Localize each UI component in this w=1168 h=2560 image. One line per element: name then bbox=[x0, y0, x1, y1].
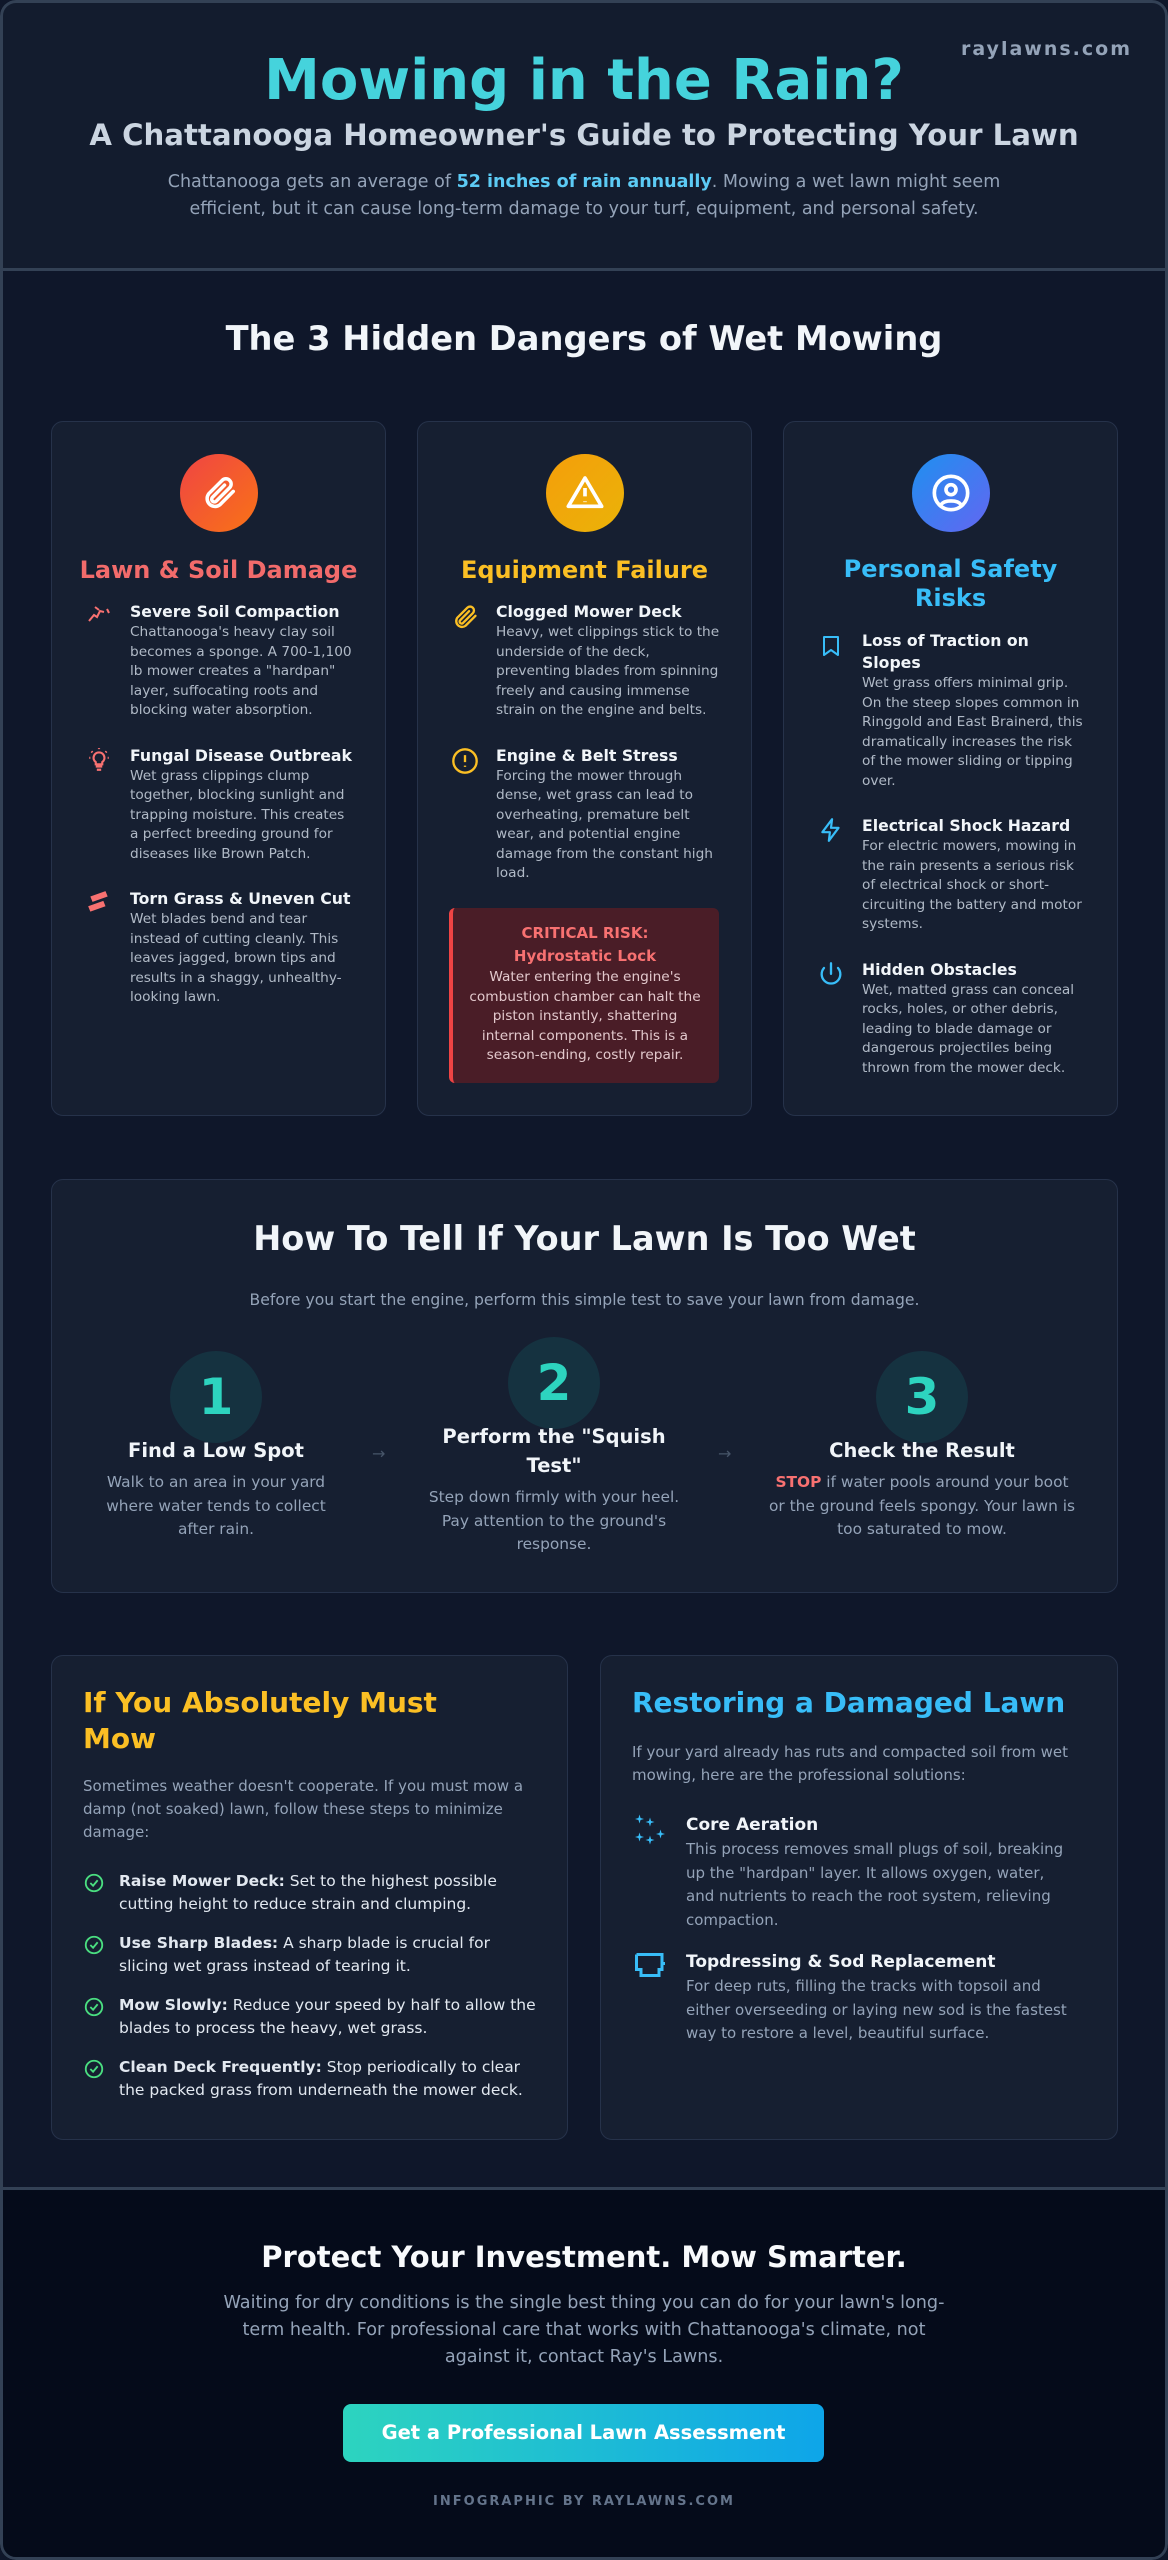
step 2: response. bbox=[517, 1535, 591, 1553]
item: shock: For electric mowers, mowing in the rain presents a serious risk of electrical shock or short-circuiting the battery and motor systems. bbox=[862, 838, 1082, 932]
subtitle: A Chattanooga Homeowner's Guide to Protecting Your Lawn bbox=[89, 118, 1079, 152]
checklist bbox=[84, 1872, 536, 2099]
item: obstacles: Hidden Obstacles bbox=[862, 960, 1017, 978]
item: clogged deck: Heavy, wet clippings stick to the underside of the deck, preventing blades from spinning freely and causing immense strain on the engine and belts. bbox=[496, 624, 719, 718]
item: shock bbox=[821, 816, 1082, 932]
CTA button: Get a Professional Lawn Assessment bbox=[382, 2421, 785, 2444]
item: topdressing bbox=[635, 1952, 1067, 2042]
item: clogged deck: Clogged Mower Deck bbox=[496, 602, 682, 621]
card title: Lawn & Soil Damage bbox=[80, 556, 357, 584]
step 3: Check the Result bbox=[829, 1439, 1015, 1462]
subheading: Before you start the engine, perform this simple test to save your lawn from damage. bbox=[250, 1291, 919, 1309]
footer panel bbox=[0, 2187, 1168, 2560]
step 3: or the ground feels spongy. Your lawn is bbox=[769, 1496, 1075, 1514]
card title: Equipment Failure bbox=[461, 556, 708, 584]
step 3: STOP if water pools around your boot bbox=[775, 1473, 1069, 1491]
item: core aeration: This process removes small plugs of soil, breaking up the "hardpan" layer. It allows oxygen, water, and nutrients to reach the root system, relieving compaction. bbox=[686, 1840, 1063, 1928]
intro text: Chattanooga gets an average of 52 inches of rain annually. Mowing a wet lawn might seem efficient, but it can cause long-term damage to your turf, equipment, and personal safety. bbox=[168, 172, 1000, 219]
step 2: Pay attention to the ground's bbox=[442, 1512, 666, 1530]
section heading: dangers: The 3 Hidden Dangers of Wet Mowing bbox=[226, 319, 942, 358]
heading: Mow bbox=[83, 1722, 156, 1755]
panel: lawn & soil damage bbox=[51, 421, 386, 1116]
footer text: Waiting for dry conditions is the single best thing you can do for your lawn's long-term health. For professional care that works with Chattanooga's climate, not against it, contact Ray's Lawns. bbox=[224, 2293, 944, 2367]
item: engine stress: Forcing the mower through dense, wet grass can lead to overheating, premature belt wear, and potential engine damage from the constant high load. bbox=[496, 768, 713, 881]
heading bbox=[83, 1686, 437, 1755]
item: fungal disease: Wet grass clippings clump together, blocking sunlight and trapping moisture. This creates a perfect breeding ground for diseases like Brown Patch. bbox=[130, 768, 344, 862]
checklist: Mow Slowly: Reduce your speed by half to allow the blades to process the heavy, wet grass. bbox=[119, 1996, 536, 2037]
item: engine stress bbox=[452, 746, 713, 881]
panel: equipment failure bbox=[417, 421, 752, 1116]
item: traction bbox=[823, 631, 1083, 788]
item: traction: Loss of Traction on Slopes bbox=[862, 631, 1029, 672]
item: core aeration bbox=[635, 1814, 1063, 1928]
step 1: Walk to an area in your yard bbox=[107, 1473, 325, 1491]
card title bbox=[844, 555, 1057, 612]
CTA button bbox=[343, 2404, 824, 2462]
arrow 2: → bbox=[718, 1444, 731, 1463]
title: Mowing in the Rain? bbox=[264, 48, 904, 113]
step 2: 2 bbox=[537, 1354, 571, 1412]
callout: critical risk bbox=[449, 908, 719, 1083]
heading: How To Tell If Your Lawn Is Too Wet bbox=[253, 1219, 916, 1258]
header panel bbox=[0, 0, 1168, 271]
intro: If your yard already has ruts and compacted soil from wet mowing, here are the professional solutions: bbox=[632, 1743, 1068, 1784]
item: core aeration: Core Aeration bbox=[686, 1815, 818, 1835]
callout: critical risk: Hydrostatic Lock bbox=[514, 947, 656, 965]
step 3: too saturated to mow. bbox=[837, 1520, 1007, 1538]
step 2: Perform the "Squish bbox=[442, 1425, 666, 1448]
checklist: Use Sharp Blades: A sharp blade is crucial for slicing wet grass instead of tearing it. bbox=[119, 1934, 490, 1975]
item: traction: Wet grass offers minimal grip. On the steep slopes common in Ringgold and East Brainerd, this dramatically increases the risk of the mower sliding or tipping over. bbox=[862, 675, 1083, 788]
panel: how to tell bbox=[51, 1179, 1118, 1593]
card title: Risks bbox=[915, 584, 986, 612]
site label: raylawns.com bbox=[961, 38, 1132, 60]
step 2: Step down firmly with your heel. bbox=[429, 1488, 679, 1506]
item: soil compaction: Chattanooga's heavy clay soil becomes a sponge. A 700-1,100 lb mower creates a "hardpan" layer, suffocating roots and blocking water absorption. bbox=[130, 624, 352, 718]
item: topdressing: Topdressing & Sod Replacement bbox=[686, 1952, 995, 1972]
step 1: Find a Low Spot bbox=[128, 1439, 304, 1462]
step 2 bbox=[429, 1337, 679, 1553]
arrow 1: → bbox=[372, 1444, 385, 1463]
item: torn grass: Wet blades bend and tear instead of cutting cleanly. This leaves jagged, brown tips and results in a shaggy, unhealthy-looking lawn. bbox=[130, 911, 342, 1005]
item: obstacles: Wet, matted grass can conceal rocks, holes, or other debris, leading to blade damage or dangerous projectiles being thrown from the mower deck. bbox=[862, 982, 1074, 1076]
icon: warning bbox=[546, 454, 624, 532]
item: soil compaction: Severe Soil Compaction bbox=[130, 602, 340, 621]
item: torn grass bbox=[88, 889, 350, 1005]
item: clogged deck bbox=[455, 602, 719, 718]
panel: restoring bbox=[600, 1655, 1118, 2140]
item: fungal disease bbox=[89, 746, 352, 862]
callout: critical risk: CRITICAL RISK: bbox=[522, 924, 648, 942]
step 3 bbox=[769, 1351, 1075, 1538]
step 2: Test" bbox=[526, 1454, 582, 1477]
icon: user circle bbox=[912, 454, 990, 532]
heading: If You Absolutely Must bbox=[83, 1686, 437, 1719]
callout: critical risk: Water entering the engine's combustion chamber can halt the piston instantly, shattering internal components. This is a season-ending, costly repair. bbox=[469, 969, 701, 1063]
item: obstacles bbox=[820, 960, 1074, 1076]
item: topdressing: For deep ruts, filling the tracks with topsoil and either overseeding or laying new sod is the fastest way to restore a level, beautiful surface. bbox=[686, 1977, 1067, 2042]
step 1 bbox=[106, 1351, 326, 1538]
panel: must mow bbox=[51, 1655, 568, 2140]
step 1: 1 bbox=[199, 1368, 233, 1426]
item: soil compaction bbox=[88, 602, 352, 718]
footer heading: Protect Your Investment. Mow Smarter. bbox=[261, 2240, 907, 2274]
intro: Sometimes weather doesn't cooperate. If you must mow a damp (not soaked) lawn, follow these steps to minimize damage: bbox=[83, 1777, 523, 1841]
step 1: after rain. bbox=[178, 1520, 254, 1538]
step 3: 3 bbox=[905, 1368, 939, 1426]
item: torn grass: Torn Grass & Uneven Cut bbox=[130, 889, 350, 908]
icon: paperclip red bbox=[180, 454, 258, 532]
item: shock: Electrical Shock Hazard bbox=[862, 816, 1070, 835]
heading: Restoring a Damaged Lawn bbox=[632, 1686, 1065, 1719]
checklist: Clean Deck Frequently: Stop periodically to clear the packed grass from underneath the mower deck. bbox=[119, 2058, 523, 2099]
panel: personal safety bbox=[783, 421, 1118, 1116]
card title: Personal Safety bbox=[844, 555, 1057, 583]
step 1: where water tends to collect bbox=[106, 1496, 326, 1514]
item: engine stress: Engine & Belt Stress bbox=[496, 746, 678, 764]
checklist: Raise Mower Deck: Set to the highest possible cutting height to reduce strain and clumping. bbox=[119, 1872, 497, 1913]
item: fungal disease: Fungal Disease Outbreak bbox=[130, 746, 352, 764]
credit: INFOGRAPHIC BY RAYLAWNS.COM bbox=[433, 2494, 735, 2509]
